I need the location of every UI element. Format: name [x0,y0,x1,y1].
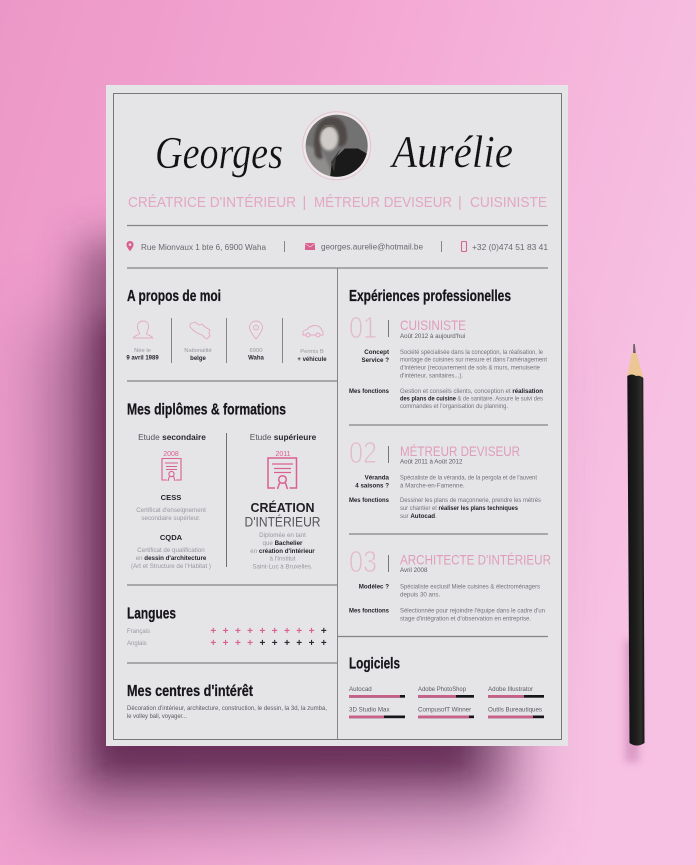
heading: Langues [127,606,176,622]
skill: autocad [349,686,405,698]
skill: 3d studio max [349,706,405,718]
skill: outils bureautiques: Outils Bureautiques [488,706,542,714]
job 02: 4 saisons ? [355,482,389,490]
paper sheet [106,85,568,746]
superior column: à l'Institut [270,556,296,562]
rating: anglais: + [223,638,229,649]
header [155,112,513,180]
rating: français: + [284,626,290,637]
job 01: Gestion et conseils clients, conception et réalisation [400,388,543,395]
job 02: Août 2011 à Août 2012 [400,458,463,466]
contact bar: georges.aurelie@hotmail.be [321,242,424,252]
contact bar: Rue Mionvaux 1 bte 6, 6900 Waha [141,243,267,252]
contact bar: +32 (0)474 51 83 41 [472,243,549,252]
icon: location [250,321,262,339]
panel: about: + véhicule [297,357,327,363]
job 02: sur chantier et réaliser les plans techniques [400,505,519,512]
job 03: Spécialiste exclusif Miele cuisines & électroménagers [400,584,540,590]
rating: français: + [259,626,265,637]
profile photo [303,112,371,180]
job 02 [349,435,541,520]
heading: A propos de moi [127,288,221,305]
job 01: d'intérieur, sanitaires...). [400,372,463,380]
rating: anglais: + [235,638,241,649]
job 01: d'intérieur (recouvrement de sols & murs, menuiserie [400,364,541,372]
job 03: Avril 2008 [400,567,428,574]
frame [114,94,562,740]
heading: Mes diplômes & formations [127,402,286,418]
skill: autocad: Autocad [349,686,372,693]
rating: anglais [210,638,327,649]
panel: about: belge [190,356,206,362]
job 02: Mes fonctions [349,497,390,504]
panel: interests: le volley ball, voyager... [127,713,187,720]
superior column: Saint-Luc à Bruxelles. [252,564,313,570]
job 02: à Marche-en-Famenne. [400,482,465,490]
job 03: ARCHITECTE D'INTÉRIEUR [400,552,551,568]
panel: interests: Décoration d'intérieur, architecture, construction, le dessin, la 3d, la zumba, [127,705,327,712]
job titles: | [302,195,306,211]
superior column: que Bachelier [263,540,303,547]
job 01: CUISINISTE [400,317,466,333]
rating: français: + [309,626,315,637]
icon: large certificate [268,458,296,489]
secondary column: (Art et Structure de l'Habitat ) [131,563,211,570]
skill: compusoft [418,706,474,718]
secondary column: Certificat de qualification [137,547,205,554]
job 01: montage de cuisines sur mesure et dans l'aménagement [400,356,547,364]
rating: français: + [223,626,229,637]
rating: français: + [321,626,327,637]
skill: illustrator [488,686,544,698]
panel: about: Nationalité [184,348,212,354]
panel: about: 6900 [250,348,262,354]
panel: about [126,288,327,363]
job 02: 02 [349,435,377,470]
job 03: depuis 30 ans. [400,592,441,598]
job 01: Société spécialisée dans la conception, la réalisation, le [400,349,544,356]
secondary column: en dessin d'architecture [136,555,207,562]
job 03: 03 [349,544,377,579]
job 01: Mes fonctions [349,388,390,395]
panel: about: Permis B [300,349,324,355]
job titles: | [458,195,462,211]
panel: software [349,656,544,718]
job 03 [349,544,551,622]
skill: outils bureautiques [488,706,544,718]
paper shadow [40,240,520,830]
job 02: Véranda [365,474,390,482]
job 01: des plans de cuisine & de sanitaire. Assure le suivi des [400,396,543,402]
skill: photoshop [418,686,474,698]
superior column: en création d'intérieur [250,548,315,555]
job 03: stage d'intégration et d'observation en entreprise. [400,616,531,622]
job 02: Dessiner les plans de maçonnerie, prendre les métrés [400,497,541,504]
icon: phone [462,242,466,252]
icon: mail [305,243,315,250]
job 01: 01 [349,310,377,345]
rating: anglais: + [309,638,315,649]
secondary column [131,432,211,570]
panel: about: Née le [134,348,151,354]
heading: Expériences professionelles [349,288,511,305]
secondary column: secondaire supérieur. [141,515,201,522]
job titles: CUISINISTE [470,195,547,211]
skill: illustrator: Adobe Illustrator [488,686,533,693]
icon: small certificate [162,458,181,481]
name: first part: Georges [155,128,283,178]
secondary column: CQDA [160,533,183,542]
job 02: Spécialiste de la véranda, de la pergola et de l'auvent [400,474,537,482]
superior column: Etude supérieure [250,432,317,442]
job 01: Août 2012 à aujourd'hui [400,333,465,340]
job 01: Concept [364,349,389,356]
icon: pin [126,241,134,251]
panel: languages: Anglais [127,641,147,647]
job titles: CRÉATRICE D'INTÉRIEUR [128,194,296,211]
rating: français: + [296,626,302,637]
skill: 3d studio max: 3D Studio Max [349,706,390,714]
pencil [625,344,644,762]
icon: person [134,321,152,338]
panel: interests [127,683,327,720]
icon: car [303,326,323,337]
panel: experience [349,288,551,622]
icon: belgium map [190,322,210,339]
rating: français: + [210,626,216,637]
superior column: Diplomée en tant [259,532,306,539]
job 02: sur Autocad. [400,513,437,520]
rating: français: + [247,626,253,637]
skill: photoshop: Adobe PhotoShop [418,686,467,693]
job 01 [349,310,547,410]
job titles [128,194,547,211]
job 03: Modélec ? [359,584,389,590]
secondary column: 2008 [163,451,179,458]
rating: anglais: + [210,638,216,649]
superior column: 2011 [275,451,291,458]
rating: français: + [272,626,278,637]
secondary column: Etude secondaire [138,432,206,442]
rating: anglais: + [247,638,253,649]
secondary column: Certificat d'enseignement [136,507,206,514]
rating: français: + [235,626,241,637]
secondary column: CESS [161,493,181,502]
superior column [244,432,321,570]
name: second part: Aurélie [389,127,513,177]
rating: anglais: + [284,638,290,649]
superior column: CRÉATION [250,500,314,515]
panel: about: 9 avril 1989 [126,356,159,362]
heading: Logiciels [349,656,400,672]
rating: anglais: + [259,638,265,649]
panel: about: Waha [248,356,265,362]
rating: anglais: + [321,638,327,649]
panel: diplomas [127,402,321,570]
contact bar [126,241,549,252]
rating: français [210,626,327,637]
rating: anglais: + [272,638,278,649]
job 02: MÉTREUR DEVISEUR [400,443,520,459]
superior column: D'INTÉRIEUR [244,514,321,530]
job 03: Sélectionnée pour rejoindre l'équipe dans le cadre d'un [400,608,546,614]
job 01: commandes et l'organisation du planning. [400,403,508,410]
job titles: MÉTREUR DEVISEUR [314,194,452,211]
job 01: Service ? [361,357,389,364]
panel: languages [127,606,327,649]
job 03: Mes fonctions [349,608,390,614]
skill: compusoft: CompusofT Winner [418,706,471,714]
rating: anglais: + [296,638,302,649]
panel: languages: Français [127,629,150,635]
heading: Mes centres d'intérêt [127,683,254,700]
